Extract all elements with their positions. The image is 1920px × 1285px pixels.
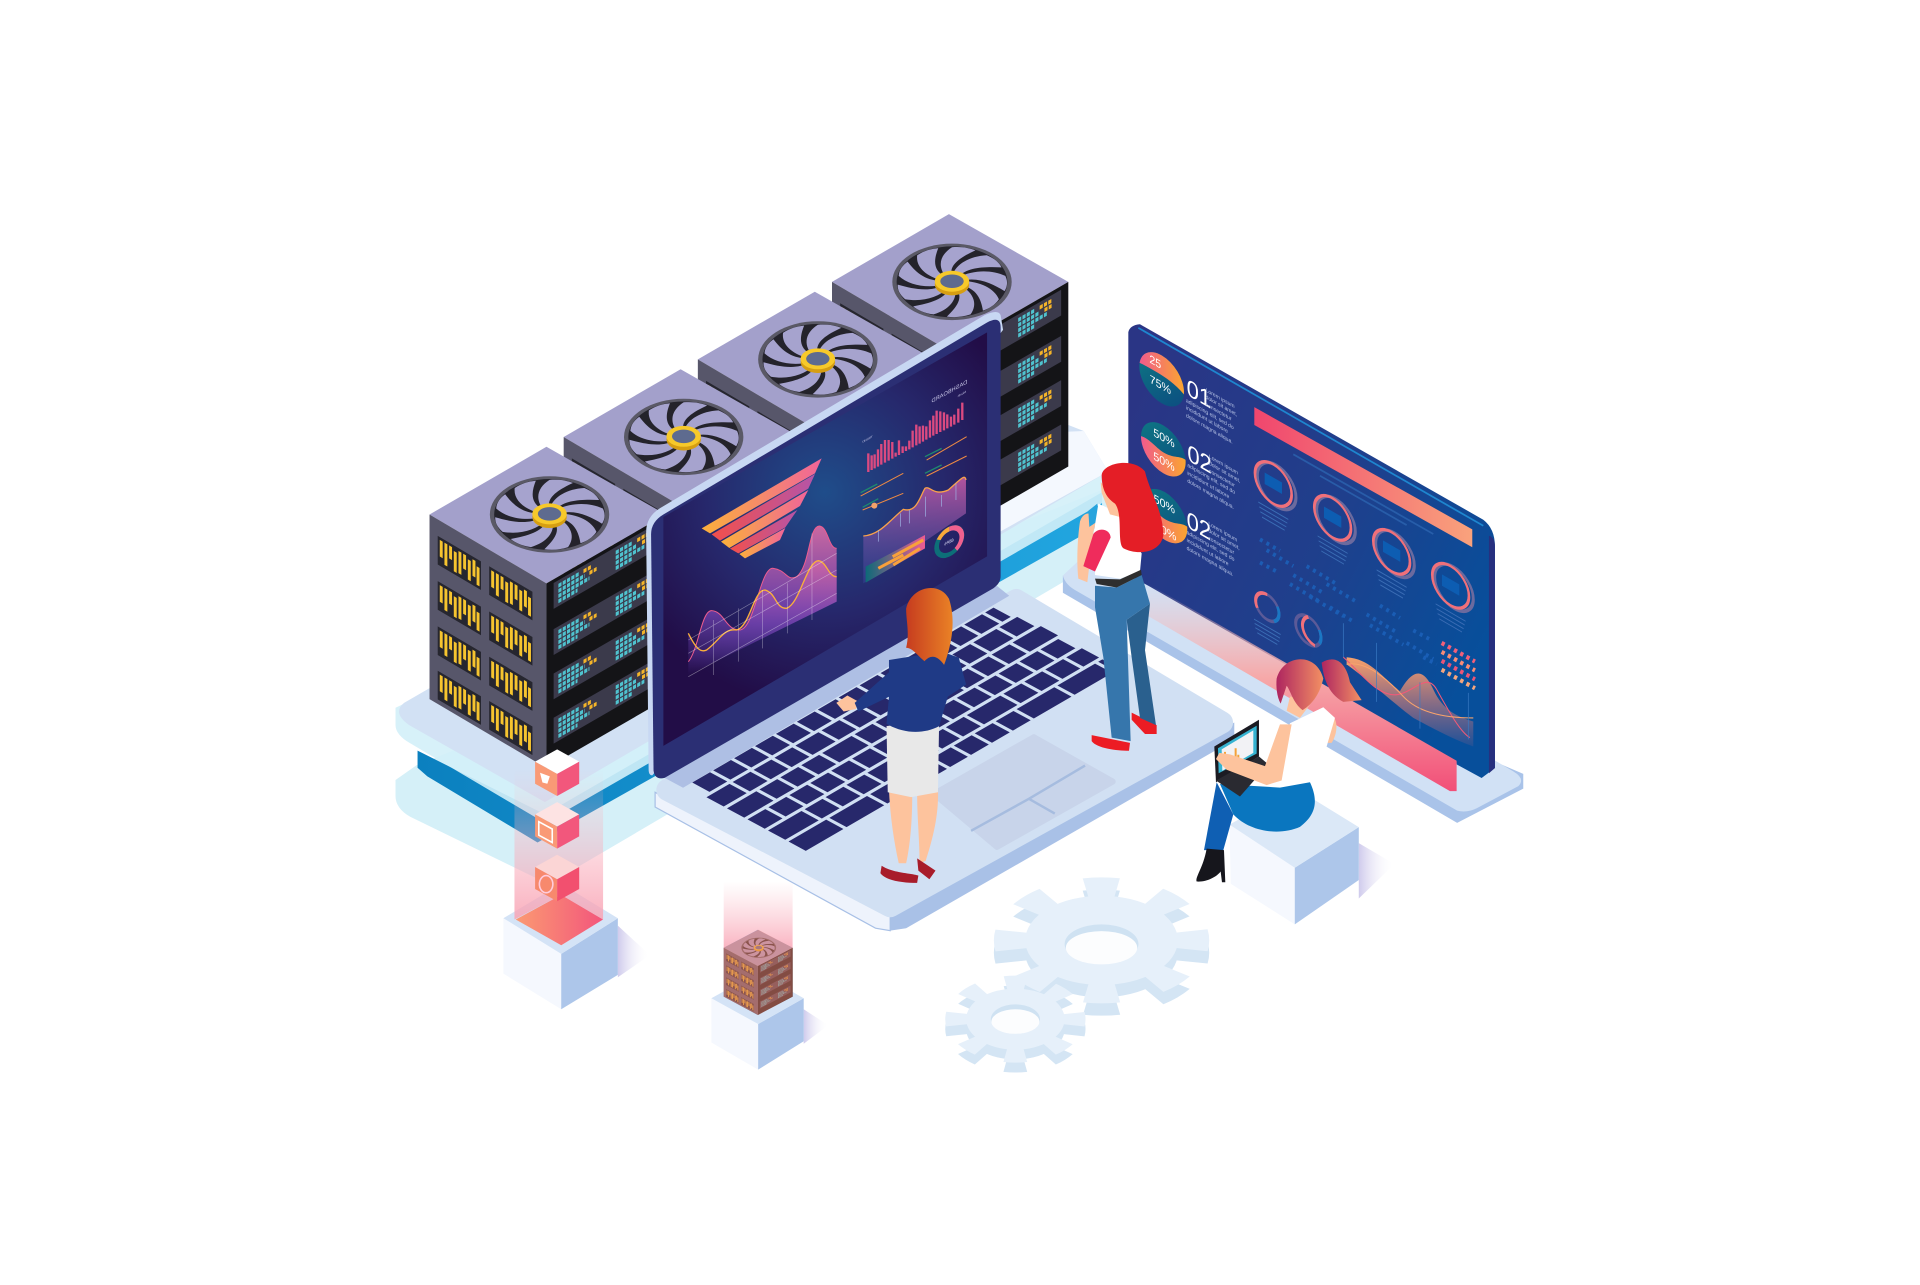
- dashboard title mirrored: TREND: [862, 435, 873, 444]
- seat cube: [1230, 788, 1394, 924]
- wave area chart: [1343, 623, 1473, 747]
- pie chart 1: 25: [1149, 352, 1162, 372]
- dashboard title mirrored: Month: [957, 390, 966, 398]
- ponytail: [1322, 659, 1362, 702]
- light beam: [724, 881, 793, 950]
- pedestal right face: [561, 918, 618, 1009]
- stacked horizontal bars: [866, 535, 925, 583]
- pedestal shadow: [804, 1009, 828, 1044]
- funnel chart: [702, 458, 822, 558]
- right arm: [1326, 714, 1336, 743]
- pie chart 1: 75%: [1150, 372, 1171, 398]
- label 02 second with text: dolor sit amet,: [1208, 528, 1240, 552]
- base top: [1063, 539, 1521, 811]
- label 01 with text: Lorem ipsum: [1206, 388, 1235, 410]
- label 02 second with text: [1187, 507, 1240, 578]
- pedestal left face: [711, 998, 758, 1070]
- slider knob: [871, 503, 877, 509]
- small gear: [958, 983, 1073, 1065]
- label 02 second with text: consectetur: [1208, 535, 1234, 556]
- pie chart 2: 50%: [1153, 449, 1175, 475]
- label 02 second with text: adipiscing elit, sed do: [1187, 530, 1234, 563]
- light beam: [514, 769, 603, 919]
- label 02 with text: Lorem ipsum: [1209, 454, 1238, 477]
- cube brain: [535, 855, 579, 901]
- torso: [1093, 504, 1142, 579]
- label 02 with text: adipiscing elit, sed do: [1187, 463, 1235, 496]
- pedestal left face: [503, 918, 561, 1009]
- coral heat map: [1442, 643, 1475, 688]
- label 02 with text: dolor sit amet,: [1209, 461, 1241, 485]
- label 02 with text: incididunt ut labore: [1187, 470, 1229, 501]
- bezel light edge: [646, 312, 1003, 775]
- bezel: [651, 320, 1001, 778]
- label 02 second with text: dolore magna aliqua.: [1187, 545, 1234, 578]
- small ring gauges: [1254, 587, 1321, 651]
- face neck: [1101, 482, 1123, 518]
- skirt: [887, 719, 939, 797]
- server rack 4: [832, 214, 1068, 535]
- jeans back leg: [1127, 604, 1156, 725]
- sleeve: [1083, 530, 1111, 571]
- laptop screen: [646, 312, 1009, 788]
- label 01 with text: consectetur: [1206, 402, 1232, 423]
- neck: [1287, 696, 1313, 718]
- coral title bar: [1254, 407, 1472, 547]
- label 02 second with text: 02: [1187, 507, 1211, 547]
- lower slab: [396, 490, 1127, 884]
- donut chart: [937, 523, 962, 560]
- boot: [1196, 849, 1225, 882]
- laptop base: [655, 600, 1234, 931]
- label 02 with text: 02: [1187, 440, 1212, 480]
- blue band: [418, 492, 1102, 843]
- mountain area chart: [688, 526, 837, 677]
- line area chart: [863, 477, 966, 583]
- dot matrix: [1260, 539, 1437, 664]
- cube graduation cap: [535, 749, 579, 796]
- pedestal top: [503, 884, 618, 954]
- sliders: [861, 437, 967, 510]
- woman red hair: [1077, 463, 1163, 751]
- pie chart 3: 50%: [1155, 518, 1177, 544]
- floating icon cubes: [535, 749, 579, 901]
- jeans: [1220, 782, 1315, 832]
- hair: [1276, 659, 1323, 710]
- pie chart 1: [1139, 352, 1184, 406]
- label 02 with text: [1187, 440, 1241, 511]
- server rack 2: [564, 369, 800, 691]
- right display base: [1063, 539, 1523, 823]
- hair: [1102, 463, 1163, 552]
- left side: [655, 792, 890, 931]
- large gear: [1013, 889, 1190, 1005]
- label 01 with text: 01: [1187, 374, 1211, 415]
- label 02 with text: dolore magna aliqua.: [1187, 478, 1234, 511]
- arm: [1216, 724, 1292, 785]
- server rack 1: [430, 447, 666, 768]
- panel face: [1128, 324, 1495, 778]
- mini server: [724, 930, 793, 1015]
- top: [1277, 707, 1335, 793]
- legs: [889, 787, 938, 863]
- label 01 with text: dolor sit amet,: [1206, 394, 1237, 419]
- keyboard: [695, 609, 1111, 846]
- pink glow strip: [1148, 584, 1457, 791]
- pie chart 3: [1151, 488, 1188, 544]
- red glowing plate: [516, 895, 603, 945]
- dashboard title mirrored: [862, 380, 967, 444]
- lower leg: [1204, 782, 1233, 850]
- tablet keyboard: [1216, 757, 1268, 797]
- pie chart 2: 50%: [1153, 425, 1175, 451]
- pie chart 2: [1141, 422, 1186, 476]
- right display panel: [1128, 324, 1495, 791]
- hair: [906, 588, 953, 665]
- deck: [667, 600, 1222, 906]
- pie chart 3: 50%: [1154, 491, 1175, 517]
- label 02 second with text: incididunt ut labore: [1187, 538, 1229, 568]
- server rack 3: [698, 292, 934, 613]
- label 01 with text: incididunt ut labore: [1186, 405, 1228, 435]
- screen area: [663, 332, 987, 746]
- left arm: [1077, 513, 1096, 582]
- woman orange hair: [836, 588, 966, 883]
- four ring gauges: [1255, 453, 1473, 639]
- seat right: [1295, 827, 1359, 924]
- label 01 with text: [1186, 374, 1237, 446]
- donut chart: 65%: [944, 538, 954, 548]
- slab top surface: [399, 382, 1108, 802]
- phone: [1088, 504, 1097, 527]
- right side: [890, 722, 1234, 931]
- dashboard title mirrored: DASHBOARD: [931, 380, 967, 405]
- base side: [1063, 576, 1523, 823]
- pedestal right face: [758, 998, 804, 1070]
- jeans front leg: [1095, 575, 1150, 741]
- seat top: [1230, 788, 1359, 868]
- pedestal right: [711, 881, 828, 1070]
- pedestal top: [711, 972, 804, 1024]
- seat shadow: [1359, 843, 1394, 899]
- platform under servers: [396, 382, 1127, 884]
- label 02 with text: consectetur: [1209, 468, 1235, 489]
- belt: [1095, 570, 1142, 588]
- shoes: [880, 858, 936, 883]
- label 01 with text: adipiscing elit, sed do: [1186, 398, 1234, 431]
- jacket: [855, 651, 966, 732]
- pedestal left: [503, 769, 650, 1009]
- arm hand: [836, 696, 858, 711]
- pedestal shadow: [618, 926, 650, 977]
- upper slab: [396, 382, 1108, 823]
- shoes: [1092, 713, 1157, 751]
- woman seated: [1196, 659, 1362, 882]
- label 01 with text: dolore magna aliqua.: [1186, 413, 1233, 446]
- bar chart: [868, 403, 962, 472]
- label 02 second with text: Lorem ipsum: [1208, 521, 1237, 544]
- cube gift: [535, 802, 579, 849]
- trackpad: [934, 737, 1113, 847]
- seat left: [1230, 825, 1295, 924]
- tablet screen: [1214, 720, 1259, 782]
- hinge shadow: [665, 586, 1009, 788]
